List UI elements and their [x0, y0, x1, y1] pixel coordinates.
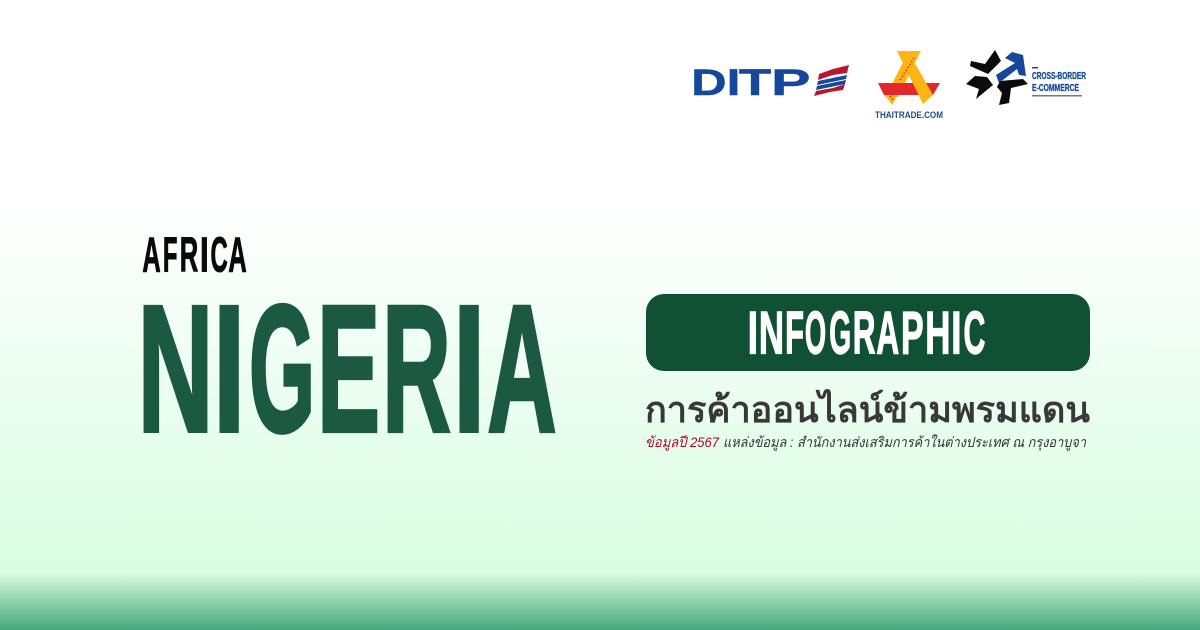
badge: Infographic: [646, 294, 1090, 371]
heading: Africa: I: [200, 228, 209, 282]
heading: Nigeria: E: [317, 267, 380, 470]
heading: Africa: A: [142, 229, 161, 283]
heading: Africa: R: [180, 229, 198, 283]
logo: DITP: T: [739, 62, 771, 103]
badge: Infographic: P: [901, 300, 924, 367]
heading: Nigeria: I: [213, 269, 245, 470]
heading: Africa: C: [210, 228, 228, 283]
footer gradient band: [0, 574, 1200, 630]
heading: Nigeria: N: [138, 268, 213, 470]
source note: ข้อมูลปี 2567: [645, 434, 720, 451]
heading: Africa: [142, 228, 247, 283]
badge: Infographic: I: [951, 298, 962, 367]
logo: DITP: P: [771, 62, 811, 103]
heading: Nigeria: I: [453, 269, 485, 470]
logo: Cross-border e-commerce: CROSS-BORDER: [1032, 71, 1087, 82]
logo: Thaitrade: THAITRADE.COM: [875, 110, 943, 121]
badge: Infographic: I: [748, 298, 758, 367]
heading: Nigeria: A: [487, 268, 557, 470]
badge: Infographic: F: [785, 299, 804, 367]
badge: Infographic: C: [964, 300, 985, 367]
badge: Infographic: A: [876, 299, 899, 367]
logo: DITP: D: [691, 63, 726, 104]
badge: Infographic: H: [925, 299, 950, 367]
heading: Nigeria: [138, 267, 557, 470]
logo: Cross-border e-commerce: [966, 50, 1087, 105]
heading: Nigeria: G: [249, 267, 315, 470]
logo: DITP: I: [727, 63, 740, 104]
logo: Cross-border e-commerce: E-COMMERCE: [1032, 83, 1079, 94]
logo: Thaitrade: [875, 51, 943, 121]
badge: Infographic: G: [829, 300, 851, 368]
badge: Infographic: O: [805, 298, 826, 366]
source note: แหล่งข้อมูล : สำนักงานส่งเสริมการค้าในต่างประเทศ ณ กรุงอาบูจา: [723, 434, 1087, 451]
heading: Nigeria: R: [382, 267, 451, 470]
logo: DITP: [691, 62, 849, 104]
badge: Infographic: R: [853, 299, 875, 367]
Thai subtitle: การค้าออนไลน์ข้ามพรมแดน: [645, 388, 1090, 430]
heading: Africa: A: [228, 229, 247, 283]
badge: Infographic: N: [759, 299, 784, 367]
heading: Africa: F: [163, 228, 178, 283]
